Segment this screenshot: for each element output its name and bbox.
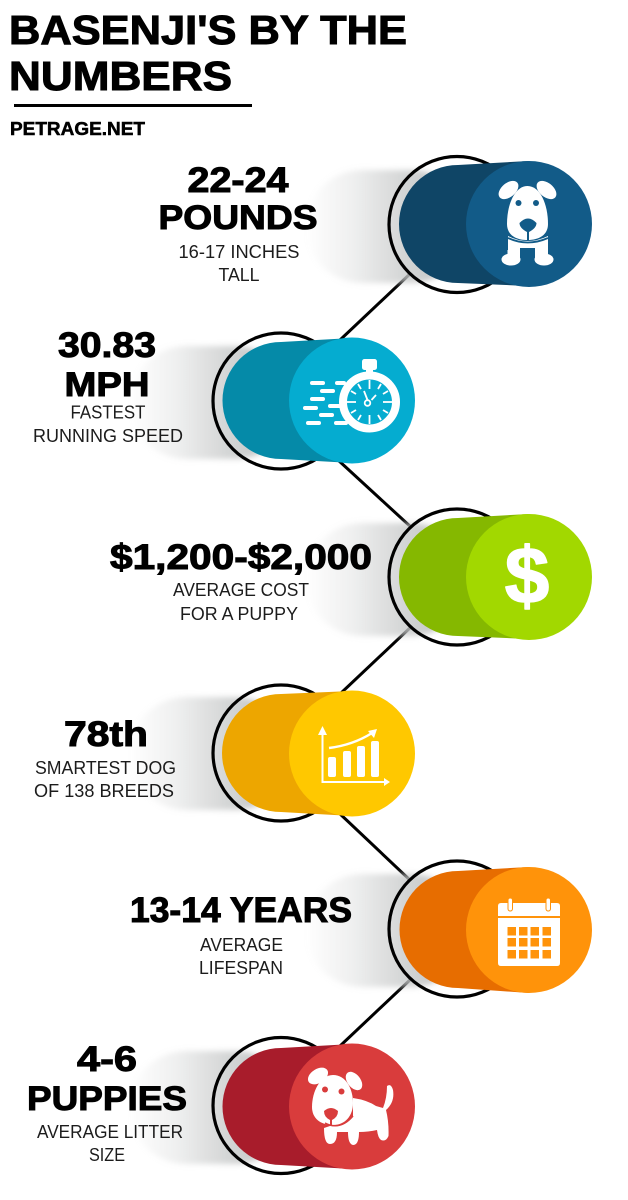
icon: calendar [498, 898, 560, 966]
source label: PETRAGE.NET [10, 119, 145, 139]
text: litter: SIZE [89, 1144, 125, 1165]
row 3: cost [306, 509, 592, 645]
text: cost: $1,200-$2,000 [110, 538, 372, 577]
text: lifespan: LIFESPAN [199, 957, 283, 978]
pill [222, 691, 352, 816]
text: weight [158, 161, 318, 285]
row 1: weight [306, 156, 592, 292]
row 5: lifespan [306, 861, 592, 997]
text: speed: MPH [64, 366, 150, 404]
text: lifespan: 13-14 YEARS [130, 891, 352, 930]
text: speed [33, 326, 183, 446]
badge circle [289, 690, 415, 816]
icon: dollar sign: $ [505, 531, 549, 620]
text: cost [110, 538, 372, 624]
text: litter: 4-6 [77, 1040, 137, 1079]
ring and shadow [306, 509, 525, 645]
text: intelligence: OF 138 BREEDS [34, 780, 174, 801]
title: NUMBERS [9, 53, 232, 99]
text: intelligence [34, 715, 176, 801]
pill [399, 514, 529, 639]
text: weight: TALL [218, 264, 260, 285]
ring and shadow [306, 861, 525, 997]
ring and shadow [306, 156, 525, 292]
text: litter [27, 1040, 187, 1165]
text: intelligence: 78th [64, 715, 148, 754]
text: lifespan: AVERAGE [200, 934, 283, 955]
ring and shadow [130, 1038, 349, 1174]
pill [400, 867, 529, 993]
icon: dog [495, 177, 560, 266]
row 2: speed [130, 333, 415, 469]
icon: puppy [305, 1064, 393, 1145]
title [9, 7, 407, 99]
text: lifespan [130, 891, 352, 978]
row 6: litter [130, 1038, 415, 1174]
ring and shadow [130, 333, 349, 469]
badge circle [289, 338, 415, 464]
text: intelligence: SMARTEST DOG [35, 757, 176, 778]
text: litter: AVERAGE LITTER [37, 1121, 183, 1142]
pill [223, 1044, 352, 1169]
icon: stopwatch [303, 359, 396, 428]
text: weight: 22-24 [188, 161, 289, 200]
text: speed: 30.83 [58, 326, 156, 365]
text: cost: FOR A PUPPY [180, 603, 298, 624]
text: litter: PUPPIES [27, 1080, 187, 1118]
badge circle [466, 514, 592, 640]
row 4: intelligence [130, 685, 415, 821]
pill [223, 338, 352, 463]
text: cost: AVERAGE COST [173, 579, 309, 600]
text: weight: 16-17 INCHES [178, 241, 300, 262]
ring and shadow [130, 685, 349, 821]
pill [399, 161, 529, 286]
connector lines [338, 272, 412, 1046]
title underline [14, 104, 252, 107]
text: speed: FASTEST [70, 402, 146, 422]
text: weight: POUNDS [158, 199, 318, 237]
text: speed: RUNNING SPEED [33, 425, 183, 446]
badge circle [466, 867, 592, 993]
title: BASENJI'S BY THE [9, 7, 407, 53]
icon: bar chart [318, 726, 390, 786]
badge circle [289, 1044, 415, 1170]
badge circle [466, 161, 592, 287]
